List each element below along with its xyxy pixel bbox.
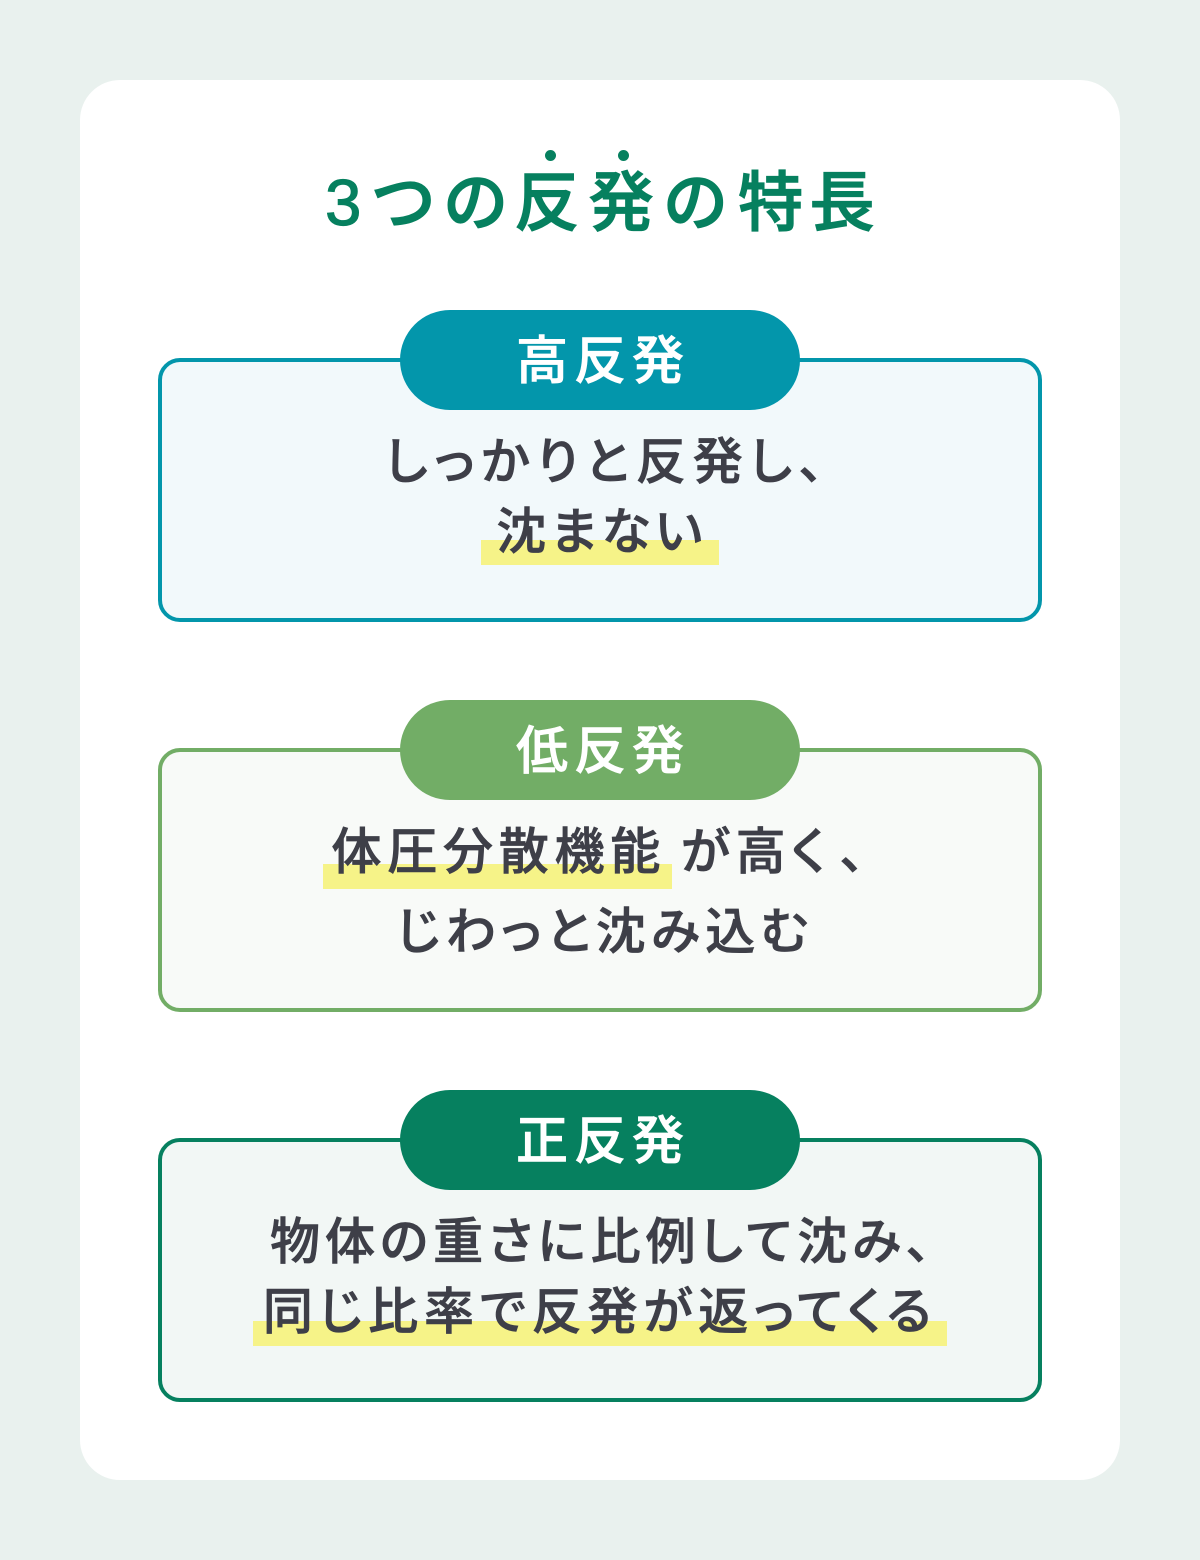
panel box bbox=[158, 1138, 1042, 1402]
text line 2: 同じ比率で反発が返ってくる bbox=[263, 1284, 937, 1340]
text line 1: 物体の重さに比例して沈み、 bbox=[270, 1214, 936, 1270]
panel: high resilience bbox=[158, 310, 1042, 622]
text line 2: 沈まない bbox=[496, 504, 707, 560]
pill heading: 低反発 bbox=[516, 723, 690, 781]
title: 3つの反発の特長 bbox=[325, 166, 884, 239]
emphasis dot 1 bbox=[545, 150, 556, 161]
highlight bbox=[481, 540, 719, 565]
pill heading: 高反発 bbox=[516, 333, 690, 391]
pill heading: 正反発 bbox=[516, 1113, 690, 1171]
text line 2: じわっと沈み込む bbox=[397, 904, 813, 960]
pill heading bbox=[400, 310, 800, 410]
pill heading bbox=[400, 1090, 800, 1190]
panel box bbox=[158, 748, 1042, 1012]
panel: linear resilience bbox=[158, 1090, 1042, 1402]
text line 1: 体圧分散機能 が高く、 bbox=[331, 824, 871, 880]
highlight bbox=[253, 1321, 947, 1346]
pill heading bbox=[400, 700, 800, 800]
text line 1: しっかりと反発し、 bbox=[385, 434, 831, 490]
white card panel bbox=[80, 80, 1120, 1480]
panel box bbox=[158, 358, 1042, 622]
panel: low resilience bbox=[158, 700, 1042, 1012]
emphasis dot 2 bbox=[618, 150, 629, 161]
highlight bbox=[323, 864, 672, 889]
